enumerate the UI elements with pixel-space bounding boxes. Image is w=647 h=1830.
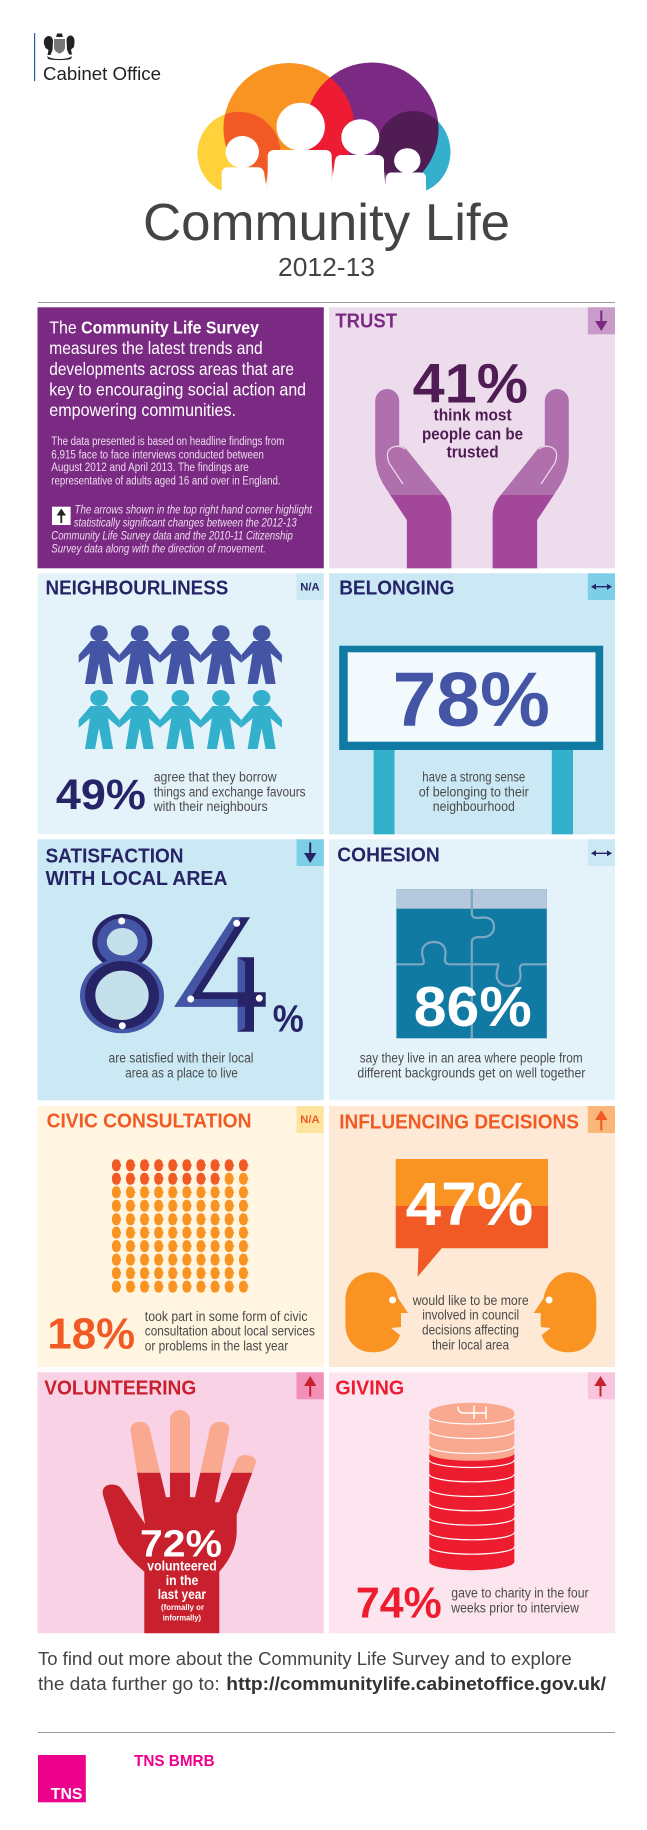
intro arrow explanation text: Survey data along with the direction of movement. <box>51 544 266 556</box>
trust caption <box>422 406 523 462</box>
icon: speech bubble <box>396 1159 548 1277</box>
icon: jigsaw puzzle <box>396 889 547 1038</box>
volunteering caption: (formally or <box>161 1602 205 1612</box>
giving caption: weeks prior to interview <box>450 1600 579 1615</box>
footer call to action: http://communitylife.cabinetoffice.gov.uk/ <box>226 1673 606 1694</box>
icon: stack of pound coins <box>429 1403 514 1570</box>
stat: 41%: 41% <box>413 352 528 415</box>
neighbourliness caption <box>153 770 306 814</box>
giving caption <box>450 1586 589 1615</box>
stat: 47%: 47% <box>406 1170 533 1238</box>
influencing caption: decisions affecting <box>422 1322 519 1337</box>
volunteering caption: informally) <box>163 1613 201 1623</box>
trend arrow: up <box>588 1372 615 1399</box>
intro arrow explanation text <box>51 504 313 556</box>
icon: royal crest <box>44 34 75 60</box>
panel: cohesion <box>329 839 615 1100</box>
volunteering caption: volunteered <box>147 1559 217 1574</box>
icon: paper-chain people, row 1 <box>79 625 282 684</box>
intro heading text: developments across areas that are <box>49 359 294 379</box>
heading: satisfaction with local area: SATISFACTION <box>46 846 184 868</box>
intro arrow explanation text: Community Life Survey data and the 2010-11 Citizenship <box>51 530 293 542</box>
heading: belonging: BELONGING <box>339 577 454 599</box>
percent sign: % <box>273 999 304 1041</box>
civic caption: took part in some form of civic <box>145 1309 308 1324</box>
civic caption: or problems in the last year <box>145 1338 289 1353</box>
influencing caption <box>412 1293 529 1352</box>
intro heading text: measures the latest trends and <box>49 338 263 358</box>
panel: satisfaction with local area <box>38 839 324 1100</box>
heading: volunteering: VOLUNTEERING <box>44 1377 196 1399</box>
subtitle: years: 2012-13 <box>278 252 375 282</box>
stat: 78%: 78% <box>393 657 550 743</box>
heading: cohesion: COHESION <box>337 845 440 867</box>
intro arrow explanation text: The arrows shown in the top right hand corner highlight <box>74 504 313 516</box>
stat: 49%: 49% <box>56 771 146 819</box>
stat: 18%: 18% <box>47 1309 135 1358</box>
intro methodology text: representative of adults aged 16 and over in England. <box>51 475 280 487</box>
cohesion caption: different backgrounds get on well together <box>357 1065 586 1080</box>
cohesion caption <box>357 1051 586 1080</box>
neighbourliness caption: with their neighbours <box>153 799 268 814</box>
text: TNS BMRB: TNS BMRB <box>134 1753 215 1770</box>
heading: satisfaction with local area <box>46 846 228 890</box>
trend arrow: down <box>296 839 324 866</box>
footer call to action: the data further go to: <box>38 1673 220 1694</box>
intro heading text: The Community Life Survey <box>49 317 259 337</box>
logo: Cabinet Office <box>34 33 161 84</box>
footer call to action <box>38 1648 606 1694</box>
chart: 100 heads, 18 highlighted <box>112 1159 249 1293</box>
intro methodology text <box>51 436 284 487</box>
heading: giving: GIVING <box>335 1377 404 1399</box>
icon: two talking faces <box>345 1272 596 1352</box>
trust caption: trusted <box>447 443 499 462</box>
trend arrow: no change <box>588 573 615 600</box>
trend badge: N/A: N/A <box>300 1114 320 1126</box>
influencing caption: would like to be more <box>412 1293 529 1308</box>
civic caption: consultation about local services <box>145 1324 315 1339</box>
belonging caption: have a strong sense <box>422 770 525 785</box>
icon: paper-chain people, row 2 <box>79 690 282 749</box>
neighbourliness caption: agree that they borrow <box>154 770 277 785</box>
icon: signpost <box>339 646 603 834</box>
trend badge: N/A <box>296 573 324 600</box>
satisfaction caption: area as a place to live <box>125 1066 238 1081</box>
panel: volunteering <box>38 1372 324 1633</box>
heading: trust: TRUST <box>335 310 397 332</box>
big numeral 4 <box>174 917 266 1032</box>
influencing caption: their local area <box>432 1337 509 1352</box>
intro methodology text: The data presented is based on headline findings from <box>51 436 284 448</box>
civic caption <box>145 1309 315 1353</box>
panel: belonging <box>329 573 615 834</box>
stat: 72%: 72% <box>140 1524 222 1566</box>
trust caption: think most <box>434 406 512 425</box>
icon: raised hand <box>103 1410 256 1633</box>
heading: civic consultation: CIVIC CONSULTATION <box>47 1111 251 1133</box>
panel: giving <box>329 1372 615 1633</box>
belonging caption <box>419 770 529 814</box>
intro heading text: key to encouraging social action and <box>49 380 306 400</box>
intro heading text <box>49 317 306 420</box>
trend badge: N/A: N/A <box>300 582 320 594</box>
big numeral 8 <box>80 914 164 1033</box>
cohesion caption: say they live in an area where people from <box>360 1051 583 1066</box>
footer call to action: To find out more about the Community Life Survey and to explore <box>38 1648 572 1669</box>
panel: trust <box>329 307 615 568</box>
belonging caption: neighbourhood <box>433 799 515 814</box>
panel: influencing decisions <box>329 1106 615 1367</box>
stat: 86%: 86% <box>414 975 532 1039</box>
intro methodology text: 6,915 face to face interviews conducted between <box>51 449 264 461</box>
text: Cabinet Office: Cabinet Office <box>43 63 161 84</box>
trend arrow: no change <box>588 839 615 866</box>
influencing caption: involved in council <box>422 1308 519 1323</box>
volunteering caption: in the <box>166 1573 199 1588</box>
trend arrow: up <box>296 1372 324 1399</box>
intro arrow explanation text: statistically significant changes between the 2012-13 <box>74 518 297 530</box>
neighbourliness caption: things and exchange favours <box>154 785 306 800</box>
heading: neighbourliness: NEIGHBOURLINESS <box>46 577 228 599</box>
trend arrow: up <box>588 1106 615 1133</box>
volunteering caption: last year <box>158 1587 207 1602</box>
trend arrow: down <box>588 307 615 334</box>
trend badge: N/A <box>296 1106 324 1133</box>
panel: civic consultation <box>38 1106 324 1367</box>
icon: family of four in overlapping circles <box>198 62 450 190</box>
icon: legend arrow <box>52 507 71 525</box>
volunteering caption <box>147 1559 217 1623</box>
panel: introduction <box>38 307 324 568</box>
title: Community Life <box>143 194 510 252</box>
icon: cupped hands <box>375 389 569 568</box>
satisfaction caption: are satisfied with their local <box>108 1051 254 1066</box>
heading: influencing decisions: INFLUENCING DECISIONS <box>339 1111 579 1133</box>
panel: neighbourliness <box>38 573 324 834</box>
stat: 74%: 74% <box>356 1578 442 1627</box>
logo: TNS <box>38 1755 86 1803</box>
trust caption: people can be <box>422 424 523 443</box>
intro heading text: empowering communities. <box>49 400 236 420</box>
logo: TNS: TNS <box>51 1786 83 1803</box>
satisfaction caption <box>108 1051 254 1081</box>
heading: satisfaction with local area: WITH LOCAL AREA <box>46 868 228 890</box>
giving caption: gave to charity in the four <box>451 1586 589 1601</box>
intro methodology text: August 2012 and April 2013. The findings are <box>51 462 249 474</box>
belonging caption: of belonging to their <box>419 785 529 800</box>
